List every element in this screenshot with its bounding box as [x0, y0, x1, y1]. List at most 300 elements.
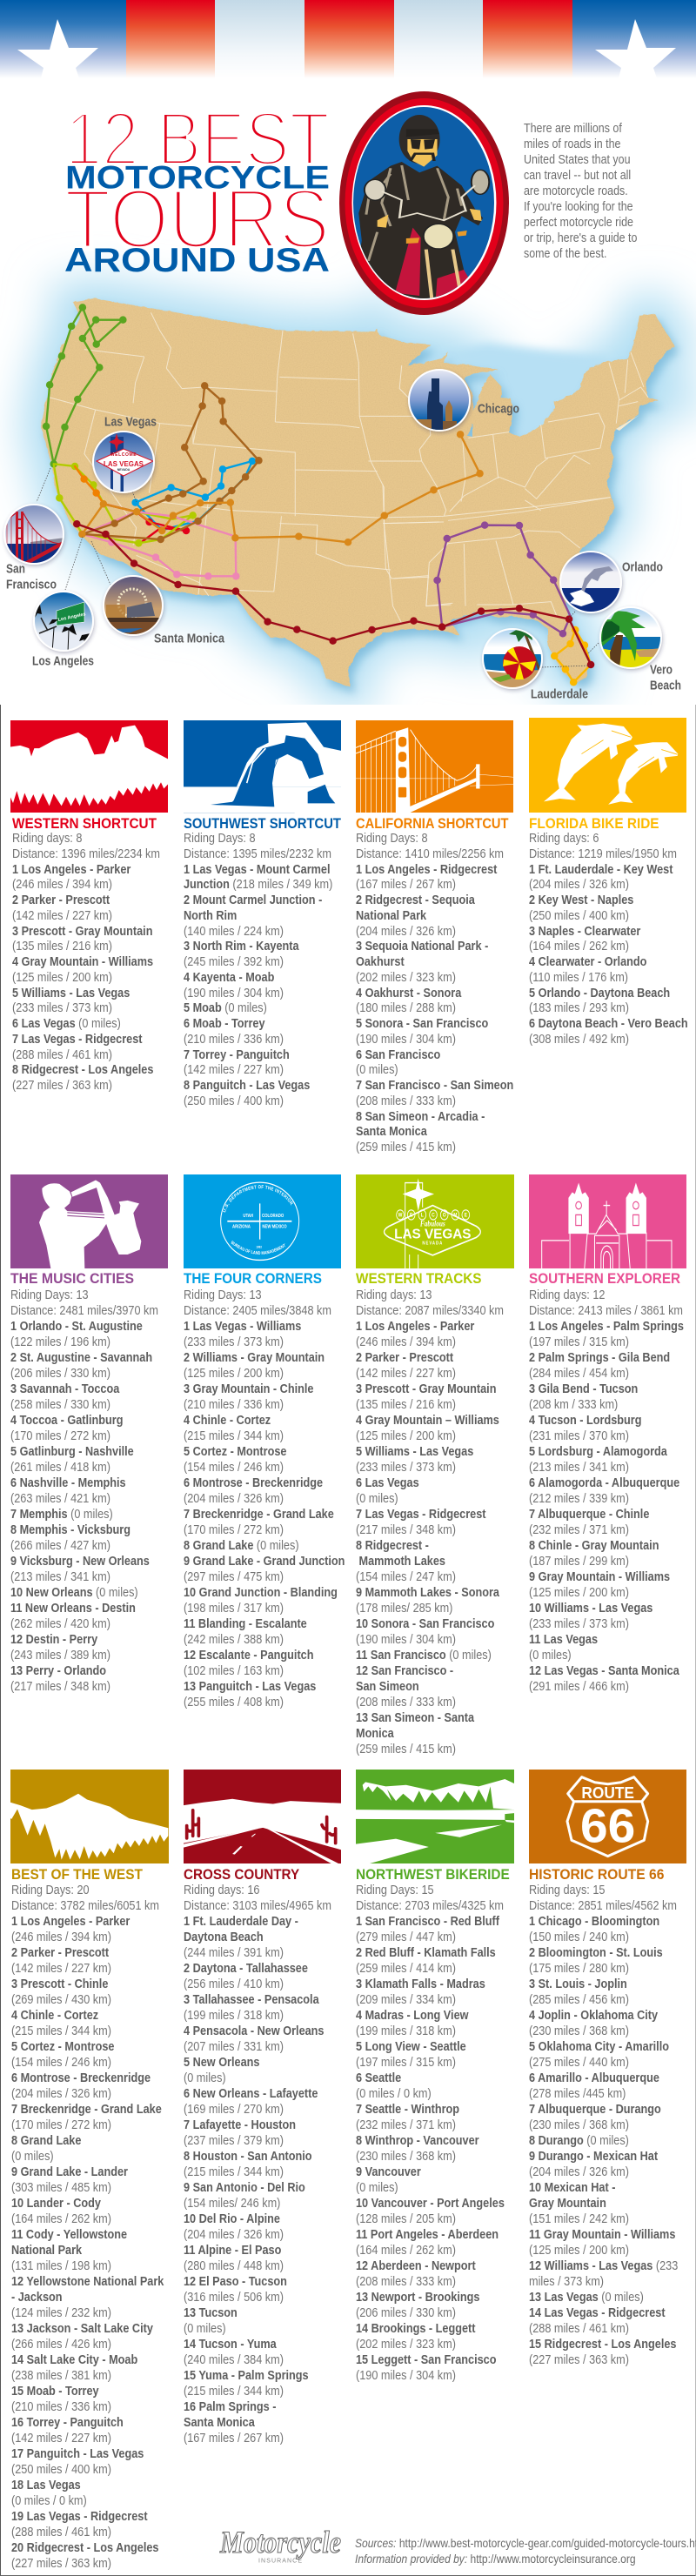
route details: 8 Memphis - Vicksburg [10, 1523, 130, 1537]
route details: 9 Durango - Mexican Hat [529, 2150, 658, 2164]
route details: (151 miles / 242 km) [529, 2212, 629, 2226]
route details: (280 miles / 448 km) [184, 2259, 284, 2273]
route details: Riding days: 16 [184, 1883, 259, 1897]
route: music cities [438, 525, 571, 633]
illustration: Las Vegas sign: NEVADA [422, 1241, 443, 1247]
route details: 12 Aberdeen - Newport [356, 2259, 476, 2273]
badge: Las Vegas [91, 431, 157, 498]
route details: Distance: 2405 miles/3848 km [184, 1304, 331, 1318]
route details: (255 miles / 408 km) [184, 1696, 284, 1710]
route details: (0 miles) [356, 2181, 398, 2195]
route details: (208 km / 333 km) [529, 1398, 618, 1412]
route details: Riding days: 12 [529, 1288, 605, 1302]
route details: (208 miles / 333 km) [356, 1696, 456, 1710]
route details: (190 miles / 304 km) [184, 987, 284, 1000]
route details [184, 1288, 345, 1710]
badge: San Francisco [3, 504, 65, 566]
illustration: four corners seal: NEW MEXICO [262, 1224, 287, 1230]
route details [529, 1883, 678, 2367]
route details: (210 miles / 336 km) [11, 2400, 111, 2414]
route details: 1 Las Vegas - Mount Carmel [184, 863, 331, 877]
route details: Distance: 2851 miles/4562 km [529, 1899, 677, 1913]
route details: 12 Williams - Las Vegas (233 [529, 2259, 678, 2273]
route details: (169 miles / 270 km) [184, 2103, 284, 2117]
route details: (202 miles / 323 km) [356, 971, 456, 985]
route details: (110 miles / 176 km) [529, 971, 628, 985]
route details: 10 New Orleans (0 miles) [10, 1586, 138, 1600]
route details: (125 miles / 200 km) [12, 971, 112, 985]
heading: FLORIDA BIKE RIDE [529, 815, 659, 832]
route details [184, 1883, 331, 2446]
logo: Motorcycle Insurance: INSURANCE [258, 2558, 302, 2565]
route details: 10 Lander - Cody [11, 2197, 101, 2211]
route details: (215 miles / 344 km) [184, 1429, 284, 1443]
route details: 7 Las Vegas - Ridgecrest [12, 1033, 143, 1047]
route details: (190 miles / 304 km) [356, 2369, 456, 2383]
route details: (316 miles / 506 km) [184, 2291, 284, 2305]
illustration: delicate arch [184, 720, 341, 813]
route: california shortcut [75, 466, 104, 504]
map labels: San [6, 562, 25, 576]
route details: (246 miles / 394 km) [12, 878, 112, 892]
panel: best of the west [10, 1770, 169, 2571]
route details: (250 miles / 400 km) [529, 909, 629, 923]
panel: cross country [184, 1770, 341, 2446]
route details: (204 miles / 326 km) [184, 1492, 284, 1506]
route details: Oakhurst [356, 955, 405, 969]
badge: Chicago [408, 369, 471, 432]
route details: (180 miles / 288 km) [356, 1001, 456, 1015]
route details: Riding Days: 13 [10, 1288, 89, 1302]
route details: Distance: 2413 miles / 3861 km [529, 1304, 683, 1318]
heading: CROSS COUNTRY [184, 1866, 299, 1883]
intro paragraph: are motorcycle roads. [524, 184, 628, 198]
panel: southern explorer [529, 1174, 686, 1694]
route details: (285 miles / 456 km) [529, 1993, 629, 2007]
route details: (240 miles / 384 km) [184, 2353, 284, 2367]
route details: 10 Williams - Las Vegas [529, 1602, 652, 1616]
route details: 7 Breckenridge - Grand Lake [11, 2103, 162, 2117]
illustration: two dolphins [529, 718, 686, 813]
route details: 2 Parker - Prescott [11, 1946, 109, 1960]
route details: 13 San Simeon - Santa [356, 1711, 474, 1725]
route details: 7 Torrey - Panguitch [184, 1047, 290, 1061]
goggles and visor [406, 129, 439, 150]
route details: (135 miles / 216 km) [356, 1398, 456, 1412]
route details: Daytona Beach [184, 1930, 264, 1944]
route details [11, 1883, 164, 2571]
route details: (207 miles / 331 km) [184, 2040, 284, 2054]
panel: historic route 66 [529, 1770, 686, 2367]
route details: 5 Gatlinburg - Nashville [10, 1445, 134, 1459]
route details: (266 miles / 426 km) [11, 2338, 111, 2352]
route details: (212 miles / 339 km) [529, 1492, 629, 1506]
route details: (210 miles / 336 km) [184, 1398, 284, 1412]
state borders [49, 312, 648, 624]
route details: Riding Days: 8 [184, 832, 256, 846]
route details: (142 miles / 227 km) [356, 1367, 456, 1381]
route details: (204 miles / 326 km) [356, 924, 456, 938]
route details: (217 miles / 348 km) [10, 1680, 110, 1694]
route details: (258 miles / 330 km) [10, 1398, 110, 1412]
route details: 6 New Orleans - Lafayette [184, 2087, 318, 2101]
route details: 10 Mexican Hat - [529, 2181, 615, 2195]
route details [356, 1883, 505, 2383]
route details: 2 St. Augustine - Savannah [10, 1351, 152, 1365]
map labels: Santa Monica [154, 632, 225, 646]
heading: WESTERN SHORTCUT [12, 815, 157, 832]
route details: 8 San Simeon - Arcadia - [356, 1110, 485, 1124]
route details: (233 miles / 373 km) [356, 1461, 456, 1475]
intro paragraph: or trip, here's a guide to [524, 231, 637, 245]
route details: (291 miles / 466 km) [529, 1680, 629, 1694]
route details: 1 Los Angeles - Palm Springs [529, 1320, 684, 1334]
route details: 5 Williams - Las Vegas [356, 1445, 473, 1459]
route details: Distance: 1410 miles/2256 km [356, 847, 504, 861]
badge: Las Vegas: NEVADA [117, 468, 130, 472]
route details: (154 miles / 246 km) [184, 1461, 284, 1475]
route details: 12 Yellowstone National Park [11, 2275, 164, 2289]
route details: 2 Bloomington - St. Louis [529, 1946, 663, 1960]
route: southern explorer [83, 512, 236, 576]
route details: 6 San Francisco [356, 1047, 440, 1061]
route details: Distance: 1395 miles/2232 km [184, 847, 331, 861]
route details: 9 Gray Mountain - Williams [529, 1570, 670, 1584]
route details: 6 Daytona Beach - Vero Beach [529, 1017, 688, 1031]
route details: San Simeon [356, 1680, 419, 1694]
route details: 3 Prescott - Gray Mountain [12, 924, 153, 938]
route details: (0 miles / 0 km) [11, 2494, 87, 2508]
route details: 4 Clearwater - Orlando [529, 955, 646, 969]
route details: 8 Durango (0 miles) [529, 2134, 629, 2148]
map labels: Lauderdale [531, 687, 588, 701]
route details: 10 Vancouver - Port Angeles [356, 2197, 505, 2211]
route details: (269 miles / 430 km) [11, 1993, 111, 2007]
route details: 7 Albuquerque - Durango [529, 2103, 661, 2117]
route details: 12 El Paso - Tucson [184, 2275, 287, 2289]
route details: (250 miles / 400 km) [11, 2463, 111, 2477]
route details: (245 miles / 392 km) [184, 955, 284, 969]
route details: Riding Days: 20 [11, 1883, 90, 1897]
panel: the four corners [184, 1174, 345, 1710]
route details: (204 miles / 326 km) [529, 878, 629, 892]
route details: (202 miles / 323 km) [356, 2338, 456, 2352]
badge: Santa Monica [103, 575, 164, 636]
sea glow behind the map [41, 298, 679, 693]
route details: 15 Leggett - San Francisco [356, 2353, 496, 2367]
helmet [399, 115, 440, 164]
route details: 9 Vicksburg - New Orleans [10, 1555, 150, 1569]
illustration: Las Vegas sign: C [432, 1213, 436, 1219]
route details: (275 miles / 440 km) [529, 2056, 629, 2070]
route details: 1 Las Vegas - Williams [184, 1320, 301, 1334]
header stripes with stars [0, 0, 696, 77]
route details: (125 miles / 200 km) [356, 1429, 456, 1443]
route details: (256 miles / 410 km) [184, 1977, 284, 1991]
route details: 5 Lordsburg - Alamogorda [529, 1445, 667, 1459]
route details: (0 miles) [11, 2150, 54, 2164]
badge: Las Vegas: LAS VEGAS [104, 460, 144, 468]
route details: (142 miles / 227 km) [184, 1063, 284, 1077]
heading: THE FOUR CORNERS [184, 1270, 322, 1287]
route details: (102 miles / 163 km) [184, 1664, 284, 1678]
route details: 3 Naples - Clearwater [529, 924, 640, 938]
illustration: four corners seal: UTAH [243, 1214, 253, 1219]
route details [356, 1288, 504, 1756]
route details: (208 miles / 333 km) [356, 1094, 456, 1108]
route details: 11 New Orleans - Destin [10, 1602, 136, 1616]
route details: 5 New Orleans [184, 2056, 259, 2070]
route details: 10 Del Rio - Alpine [184, 2212, 280, 2226]
route details: 4 Gray Mountain – Williams [356, 1414, 499, 1428]
panel: northwest bikeride [356, 1770, 514, 2383]
route details: 7 Seattle - Winthrop [356, 2103, 459, 2117]
route details: (0 miles) [184, 2322, 226, 2336]
map labels [6, 402, 681, 701]
route details: (124 miles / 232 km) [11, 2306, 111, 2320]
route details: Gray Mountain [529, 2197, 606, 2211]
map labels: Vero [650, 663, 673, 677]
illustration: four corners seal: ARIZIONA [232, 1224, 251, 1230]
route details: Riding Days: 15 [356, 1883, 434, 1897]
route details [529, 832, 688, 1047]
intro paragraph: perfect motorcycle ride [524, 215, 633, 230]
route details: 10 Sonora - San Francisco [356, 1617, 494, 1631]
route details: 1 Los Angeles - Parker [11, 1915, 130, 1929]
route details: (0 miles) [184, 2071, 226, 2085]
route details: (187 miles / 299 km) [529, 1555, 629, 1569]
route details: Riding days: 6 [529, 832, 599, 846]
route details: 2 Parker - Prescott [12, 893, 110, 907]
route details: 9 Grand Lake - Lander [11, 2165, 128, 2179]
title: AROUND USA [64, 242, 330, 279]
route details: (150 miles / 240 km) [529, 1930, 629, 1944]
route details: 5 Moab (0 miles) [184, 1001, 267, 1015]
route details: (206 miles / 330 km) [356, 2306, 456, 2320]
route details: (237 miles / 379 km) [184, 2134, 284, 2148]
heading: WESTERN TRACKS [356, 1270, 482, 1287]
route details: 2 Ridgecrest - Sequoia [356, 893, 475, 907]
route details: 12 San Francisco - [356, 1664, 453, 1678]
route details: 6 Moab - Torrey [184, 1017, 265, 1031]
route details: 3 St. Louis - Joplin [529, 1977, 627, 1991]
route details: 11 Blanding - Escalante [184, 1617, 307, 1631]
route details: 14 Tucson - Yuma [184, 2338, 277, 2352]
route details: (227 miles / 363 km) [12, 1079, 112, 1093]
route details: (263 miles / 421 km) [10, 1492, 110, 1506]
intro paragraph: can travel -- but not all [524, 168, 631, 183]
route details: (199 miles / 318 km) [356, 2024, 456, 2038]
illustration: forest and river [356, 1770, 514, 1863]
route details: 1 San Francisco - Red Bluff [356, 1915, 499, 1929]
route details: (213 miles / 341 km) [529, 1461, 629, 1475]
route: western shortcut [104, 504, 186, 542]
heading: HISTORIC ROUTE 66 [529, 1866, 664, 1883]
route details: 15 Yuma - Palm Springs [184, 2369, 309, 2383]
intro paragraph: United States that you [524, 152, 631, 167]
intro paragraph: If you're looking for the [524, 199, 633, 214]
illustration: four corners seal: BUREAU OF LAND MANAGEMENT [231, 1241, 285, 1255]
title [64, 97, 330, 279]
route details: (244 miles / 391 km) [184, 1946, 284, 1960]
route details: Distance: 2703 miles/4325 km [356, 1899, 504, 1913]
route details: (131 miles / 198 km) [11, 2259, 111, 2273]
illustration: Las Vegas sign: E [465, 1213, 467, 1219]
route details: 7 Breckenridge - Grand Lake [184, 1508, 334, 1522]
route details: 13 Jackson - Salt Lake City [11, 2322, 153, 2336]
route details: 2 Red Bluff - Klamath Falls [356, 1946, 496, 1960]
route details: (262 miles / 420 km) [10, 1617, 110, 1631]
route details: Santa Monica [356, 1125, 427, 1139]
route details: 4 Kayenta - Moab [184, 971, 274, 985]
route details: 1 Ft. Lauderdale - Key West [529, 863, 673, 877]
route details: 5 Cortez - Montrose [184, 1445, 286, 1459]
illustration: Las Vegas sign: E [410, 1213, 412, 1219]
route details [184, 832, 332, 1108]
title: TOURS [64, 171, 330, 266]
route details: (227 miles / 363 km) [11, 2557, 111, 2571]
route details: 2 Parker - Prescott [356, 1351, 453, 1365]
route details: (230 miles / 368 km) [356, 2150, 456, 2164]
route details: Distance: 3103 miles/4965 km [184, 1899, 331, 1913]
route details: 4 Chinle - Cortez [11, 2009, 98, 2023]
route details: 11 Las Vegas [529, 1633, 598, 1647]
heading: THE MUSIC CITIES [10, 1270, 134, 1287]
route details: (308 miles / 492 km) [529, 1033, 629, 1047]
route details: Riding days: 15 [529, 1883, 605, 1897]
route details: 10 Grand Junction - Blanding [184, 1586, 338, 1600]
frame lines [0, 705, 696, 2576]
route details: 7 Las Vegas - Ridgecrest [356, 1508, 486, 1522]
route details: 1 Los Angeles - Parker [12, 863, 131, 877]
map labels: Orlando [622, 560, 663, 574]
route details: 1 Orlando - St. Augustine [10, 1320, 143, 1334]
route details: (232 miles / 371 km) [529, 1523, 629, 1537]
route details: 4 Pensacola - New Orleans [184, 2024, 324, 2038]
route details: 3 Gray Mountain - Chinle [184, 1382, 313, 1396]
route details: (215 miles / 344 km) [184, 2165, 284, 2179]
route details: 15 Ridgecrest - Los Angeles [529, 2338, 676, 2352]
route details: 8 Winthrop - Vancouver [356, 2134, 479, 2148]
route details: 11 San Francisco (0 miles) [356, 1649, 492, 1663]
panel: western shortcut [10, 720, 168, 1093]
route details: (164 miles / 262 km) [356, 2244, 456, 2258]
route details: (246 miles / 394 km) [11, 1930, 111, 1944]
route details: (128 miles / 205 km) [356, 2212, 456, 2226]
illustration: Las Vegas sign: M [453, 1213, 458, 1219]
route details: (259 miles / 415 km) [356, 1141, 456, 1154]
emblem: biker in oval [339, 91, 509, 315]
route details: (178 miles/ 285 km) [356, 1602, 452, 1616]
route details: Distance: 1396 miles/2234 km [12, 847, 160, 861]
route details: (233 miles / 373 km) [12, 1001, 112, 1015]
route details: Riding days: 13 [356, 1288, 432, 1302]
panel: california shortcut [356, 720, 513, 1154]
badge: Vero Beach [599, 606, 662, 670]
title: 12 BEST [65, 97, 330, 181]
moustache [411, 154, 434, 161]
illustration: Las Vegas sign: O [443, 1213, 446, 1219]
route details: 8 Ridgecrest - [356, 1539, 429, 1553]
intro paragraph: some of the best. [524, 246, 607, 261]
biker jacket [358, 162, 483, 298]
route details: (142 miles / 227 km) [11, 2432, 111, 2446]
route details: 7 Albuquerque - Chinle [529, 1508, 649, 1522]
dotted leader lines to city badges [37, 468, 599, 667]
headlight [424, 224, 453, 249]
route details: (175 miles / 280 km) [529, 1962, 629, 1976]
intro paragraph: There are millions of [524, 121, 622, 136]
title: MOTORCYCLE [65, 160, 330, 196]
route details: (278 miles /445 km) [529, 2087, 626, 2101]
route details: 3 Gila Bend - Tucson [529, 1382, 638, 1396]
route details: (259 miles / 415 km) [356, 1743, 456, 1756]
jacket highlights [366, 165, 462, 261]
route details: North Rim [184, 909, 237, 923]
route details: 6 Montrose - Breckenridge [184, 1476, 323, 1490]
route details: Riding days: 8 [12, 832, 83, 846]
badge: Las Vegas: WELCOME [110, 452, 137, 458]
route details: 13 Perry - Orlando [10, 1664, 106, 1678]
illustration: Las Vegas sign [356, 1174, 514, 1268]
illustration: four corners seal: COLORADO [262, 1214, 284, 1219]
route details [12, 832, 160, 1093]
route details: (125 miles / 200 km) [529, 1586, 629, 1600]
illustration: Las Vegas sign: LAS VEGAS [394, 1226, 472, 1241]
route details: 4 Madras - Long View [356, 2009, 468, 2023]
badge: Los Angeles: Los Angeles [57, 612, 86, 623]
route details: (231 miles / 370 km) [529, 1429, 629, 1443]
route details: 14 Brookings - Leggett [356, 2322, 475, 2336]
route details: (0 miles) [529, 1649, 572, 1663]
route details: 3 Tallahassee - Pensacola [184, 1993, 319, 2007]
route details: Monica [356, 1727, 394, 1741]
route details: Santa Monica [184, 2416, 255, 2430]
route details: (125 miles / 200 km) [529, 2244, 629, 2258]
illustration: saxophone player [10, 1174, 168, 1268]
tank [395, 228, 468, 298]
illustration: Las Vegas sign: W [398, 1213, 403, 1219]
route details: 1 Los Angeles - Ridgecrest [356, 863, 497, 877]
illustration: four corners seal: U.S. DEPARTMENT OF THE INTERIOR [223, 1185, 292, 1213]
route details: (261 miles / 418 km) [10, 1461, 110, 1475]
route details: 7 Memphis (0 miles) [10, 1508, 113, 1522]
route details: 4 Chinle - Cortez [184, 1414, 271, 1428]
route details: 11 Port Angeles - Aberdeen [356, 2228, 499, 2242]
route details: 8 Chinle - Gray Mountain [529, 1539, 659, 1553]
map of the United States [41, 298, 674, 687]
route details: (250 miles / 400 km) [184, 1094, 284, 1108]
route details: 7 San Francisco - San Simeon [356, 1079, 513, 1093]
illustration: desert highway and cacti [184, 1770, 341, 1863]
route details: 8 Panguitch - Las Vegas [184, 1079, 310, 1093]
route details: 14 Las Vegas - Ridgecrest [529, 2306, 666, 2320]
route details: (190 miles / 304 km) [356, 1633, 456, 1647]
route details: 3 Prescott - Chinle [11, 1977, 109, 1991]
route details: National Park [11, 2244, 82, 2258]
illustration: golden gate bridge [356, 720, 513, 813]
illustration: Las Vegas sign: Fabulous [419, 1218, 445, 1228]
route details: 1 Ft. Lauderdale Day - [184, 1915, 298, 1929]
route details: 6 Amarillo - Albuquerque [529, 2071, 659, 2085]
route details: 13 Panguitch - Las Vegas [184, 1680, 316, 1694]
heading: SOUTHWEST SHORTCUT [184, 815, 341, 832]
route details: (232 miles / 371 km) [356, 2118, 456, 2132]
route: best of the west [82, 385, 258, 539]
route details: 11 Alpine - El Paso [184, 2244, 281, 2258]
map labels: Los Angeles [32, 654, 94, 668]
route details: (135 miles / 216 km) [12, 940, 112, 953]
